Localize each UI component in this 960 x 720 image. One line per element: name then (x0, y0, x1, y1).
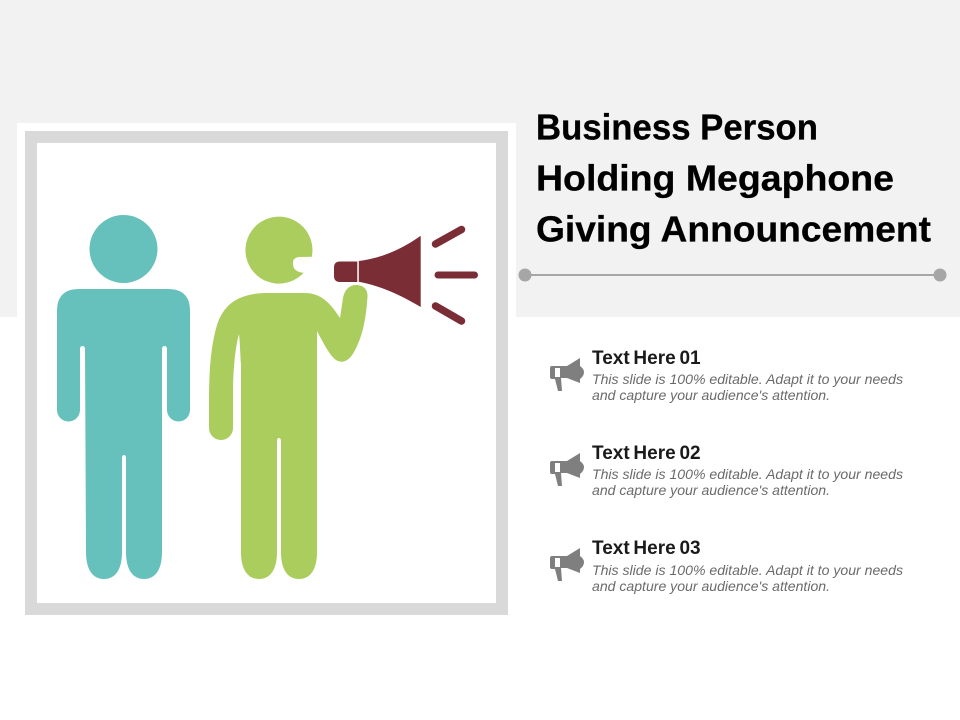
panel: illustration frame (17, 123, 516, 623)
icon: teal standing person (57, 215, 190, 579)
text block 03: This slide is 100% editable. Adapt it to your needs (592, 563, 903, 578)
text block 02 (550, 443, 903, 498)
text block 03 (550, 538, 903, 594)
text block 01: and capture your audience's attention. (592, 388, 830, 403)
icon: green person speaking (209, 217, 368, 579)
title divider with end dots (518, 268, 946, 282)
text block 02: and capture your audience's attention. (592, 483, 830, 498)
text block 01: This slide is 100% editable. Adapt it to your needs (592, 372, 903, 387)
header background band (0, 0, 960, 317)
title: Holding Megaphone (536, 158, 894, 198)
text block 01: Text Here 01 (592, 348, 701, 369)
text block 03: and capture your audience's attention. (592, 579, 830, 594)
sound wave lines (436, 230, 474, 321)
text block 02: This slide is 100% editable. Adapt it to your needs (592, 467, 903, 482)
icon: small megaphone 02 (550, 453, 584, 486)
title: Business Person (536, 106, 818, 148)
text block 03: Text Here 03 (592, 538, 701, 559)
text block 01 (550, 348, 903, 403)
icon: small megaphone 01 (550, 358, 584, 391)
icon: small megaphone 03 (550, 548, 584, 581)
text block 02: Text Here 02 (592, 443, 701, 464)
icon: maroon megaphone (334, 230, 474, 321)
title: Giving Announcement (536, 208, 931, 250)
title (536, 106, 931, 250)
